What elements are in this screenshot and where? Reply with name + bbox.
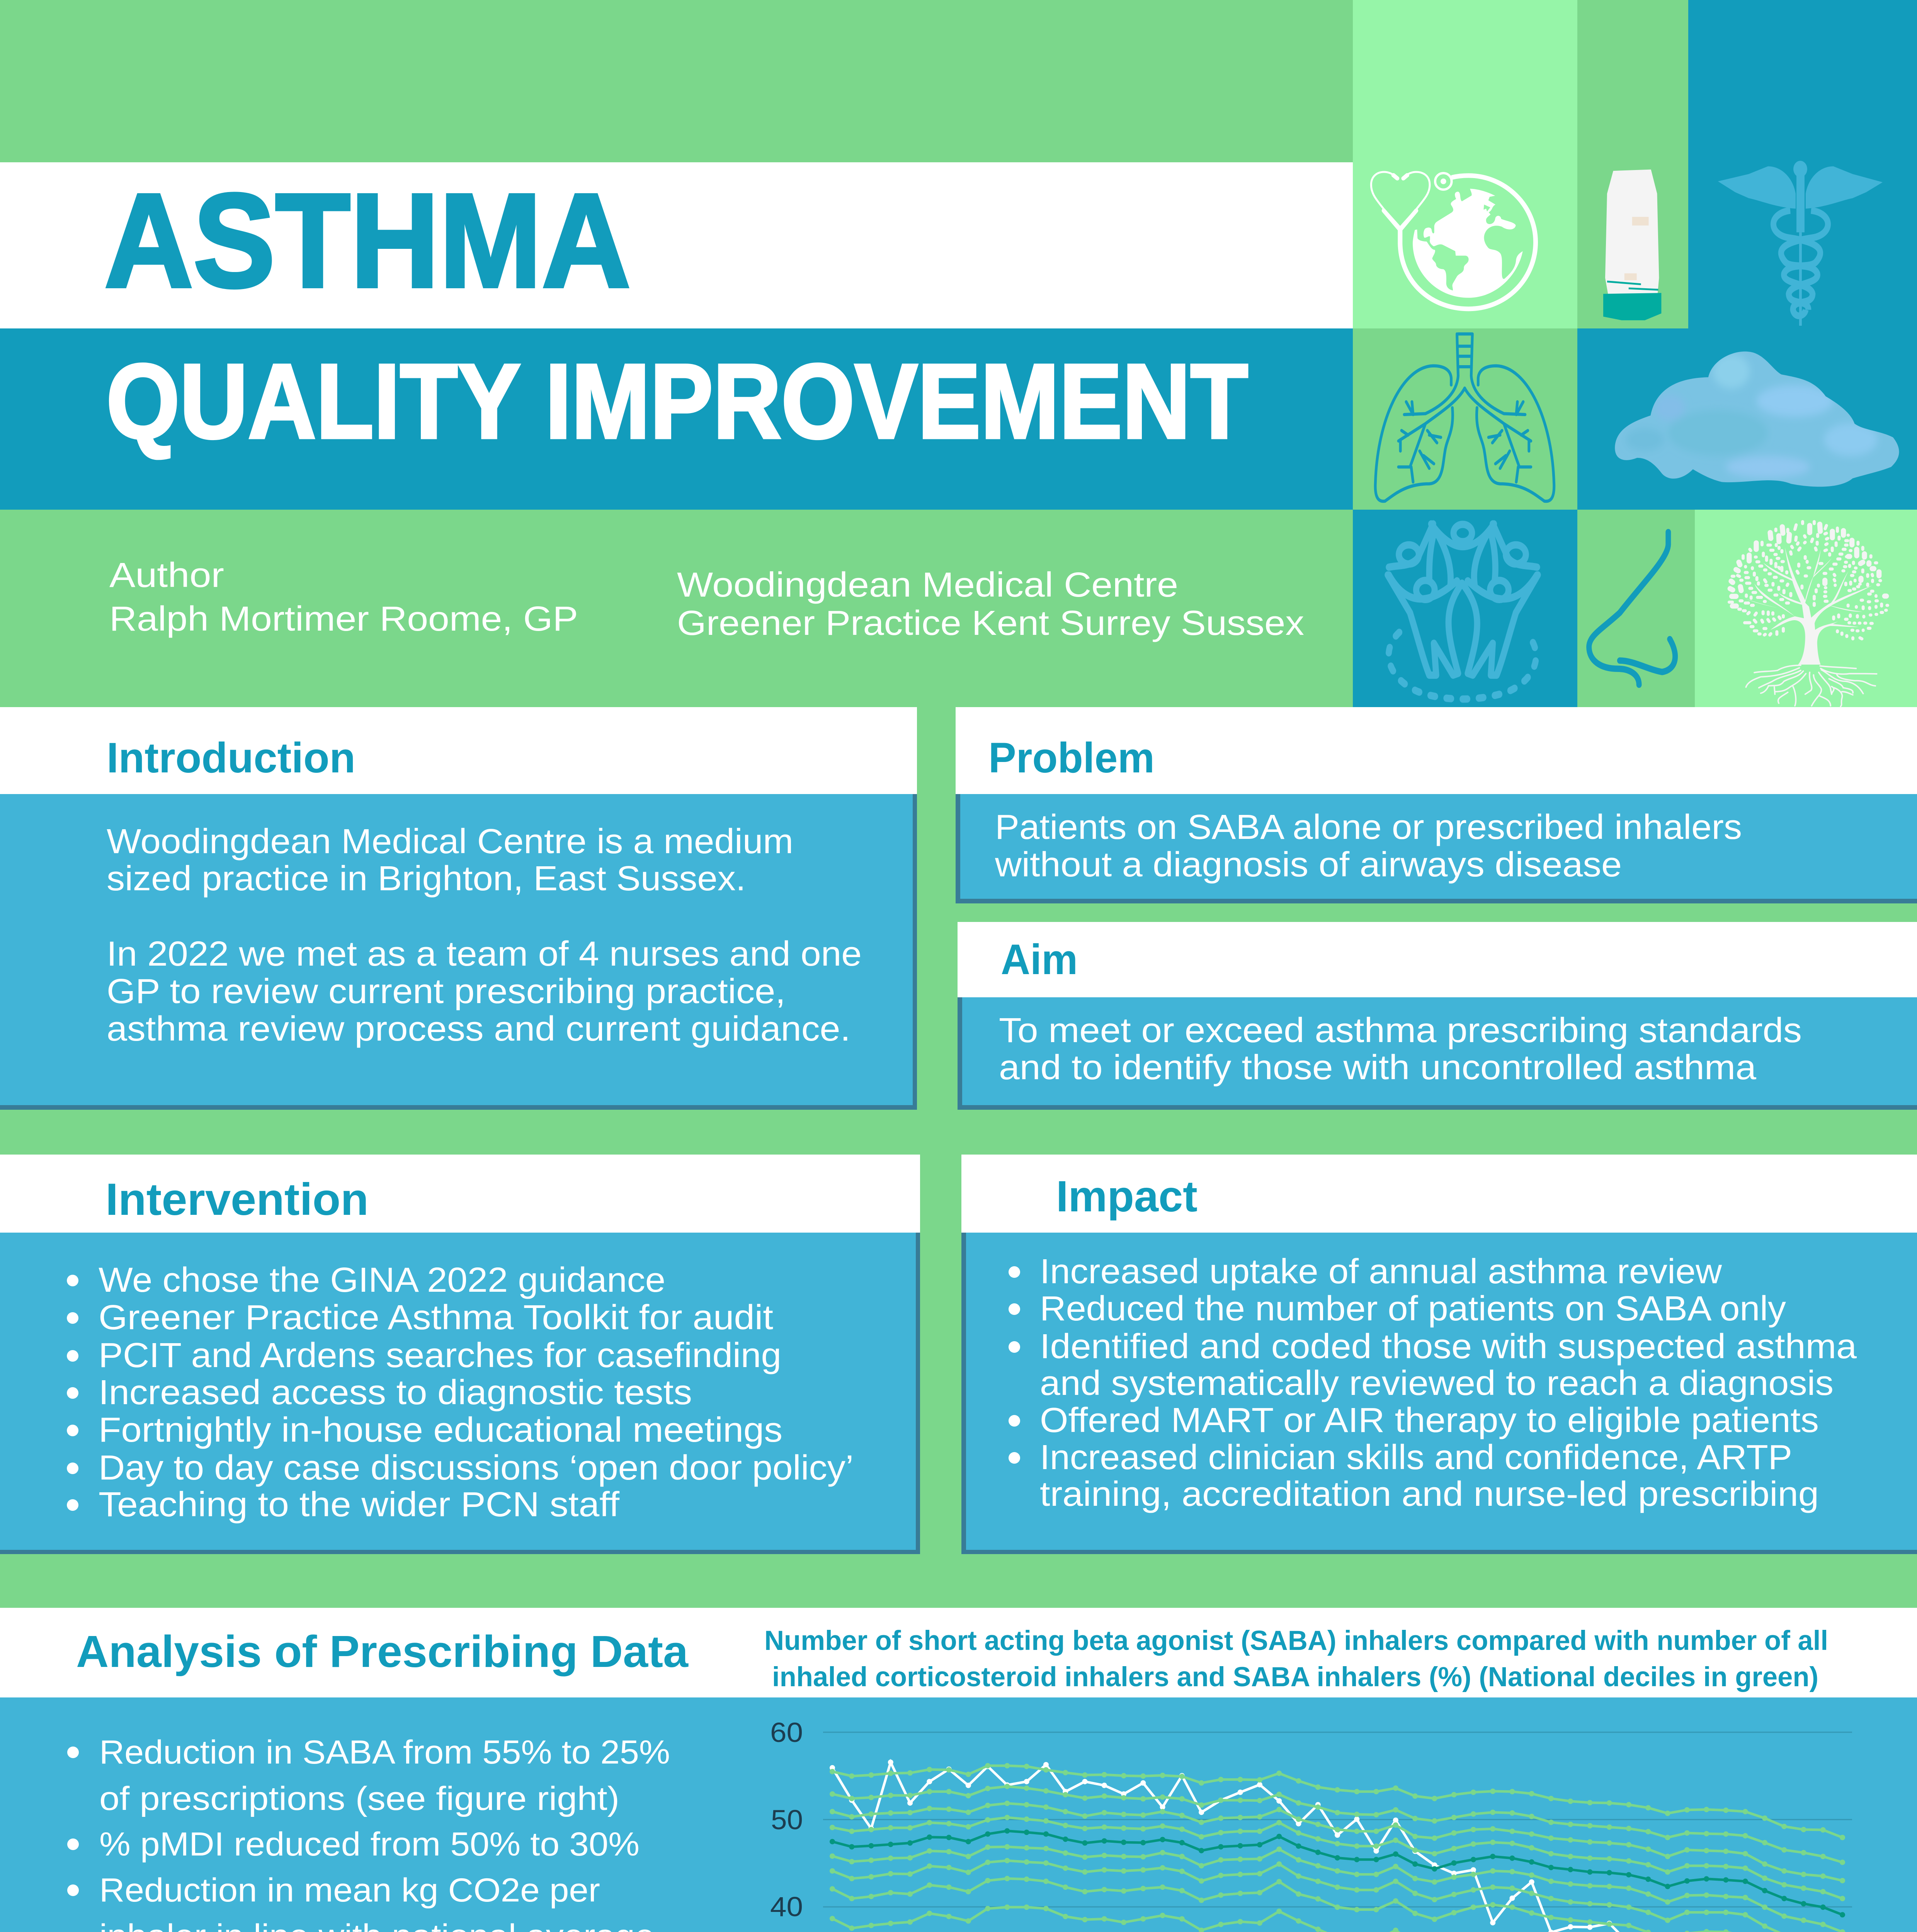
icon: lungs (1375, 334, 1554, 501)
text: problem body: Patients on SABA alone or prescribed inhalers (995, 808, 1742, 847)
list: intervention bullets: Greener Practice Asthma Toolkit for audit (99, 1298, 773, 1337)
text: aim body (999, 1011, 1802, 1087)
y axis labels (770, 1718, 803, 1932)
icon grid (1353, 0, 1917, 707)
list: analysis bullets (67, 1734, 670, 1932)
list: intervention bullets: We chose the GINA 2022 guidance (99, 1261, 665, 1299)
list: impact bullets: Reduced the number of patients on SABA only (1040, 1289, 1786, 1328)
text: aim body: and to identify those with uncontrolled asthma (999, 1048, 1757, 1087)
list: impact bullets: and systematically reviewed to reach a diagnosis (1040, 1364, 1834, 1403)
header: title (0, 162, 1353, 510)
list: intervention bullets: Fortnightly in-house educational meetings (99, 1411, 782, 1449)
icons on grid (1375, 161, 1899, 699)
panel: introduction (0, 707, 917, 1110)
text: introduction body: GP to review current prescribing practice, (107, 972, 786, 1011)
list: impact bullets: Increased clinician skills and confidence, ARTP (1040, 1438, 1792, 1477)
heading: Asthma: ASTHMA (104, 166, 631, 315)
heading: introduction: Introduction (107, 734, 356, 782)
list: impact bullets: Increased uptake of annual asthma review (1040, 1252, 1722, 1291)
list: intervention bullets: PCIT and Ardens searches for casefinding (99, 1336, 781, 1375)
icon: stethoscope and globe (1371, 172, 1536, 309)
affiliation block: Woodingdean Medical Centre (677, 566, 1178, 604)
list: intervention bullets: Teaching to the wider PCN staff (99, 1485, 620, 1524)
heading: Quality Improvement: QUALITY IMPROVEMENT (106, 342, 1248, 461)
author block: Author (109, 556, 224, 595)
text: introduction body (107, 822, 862, 1048)
author block (109, 556, 578, 638)
icon: caduceus (1718, 161, 1883, 326)
panel: impact (961, 1155, 1917, 1554)
author block: Ralph Mortimer Roome, GP (109, 600, 578, 638)
list: intervention bullets: Day to day case discussions ‘open door policy’ (99, 1449, 854, 1487)
list: intervention bullets: Increased access to diagnostic tests (99, 1373, 692, 1412)
panel: analysis of prescribing data (0, 1608, 1917, 1932)
icon: nose (1589, 532, 1675, 685)
text: aim body: To meet or exceed asthma prescribing standards (999, 1011, 1802, 1050)
y axis labels: 50 (771, 1805, 803, 1835)
list: intervention bullets (67, 1261, 854, 1524)
text: introduction body: Woodingdean Medical Centre is a medium (107, 822, 793, 861)
list: impact bullets: Identified and coded those with suspected asthma (1040, 1327, 1857, 1366)
chart title: inhaled corticosteroid inhalers and SABA inhalers (%) (National deciles in green) (772, 1662, 1818, 1692)
list: impact bullets: training, accreditation and nurse-led prescribing (1040, 1475, 1819, 1514)
panel: intervention (0, 1155, 920, 1554)
affiliation block (677, 566, 1304, 643)
text: introduction body: sized practice in Brighton, East Sussex. (107, 859, 746, 898)
list: analysis bullets: Reduction in SABA from 55% to 25% (99, 1734, 670, 1771)
icon: tree (1729, 522, 1888, 706)
text: introduction body: asthma review process and current guidance. (107, 1010, 850, 1048)
heading: impact: Impact (1056, 1172, 1197, 1221)
list: analysis bullets: % pMDI reduced from 50% to 30% (99, 1826, 640, 1863)
affiliation block: Greener Practice Kent Surrey Sussex (677, 604, 1304, 643)
heading: analysis: Analysis of Prescribing Data (76, 1626, 689, 1677)
list: analysis bullets: Reduction in mean kg CO2e per (99, 1872, 600, 1909)
text: problem body: without a diagnosis of airways disease (995, 845, 1622, 884)
chart title (764, 1626, 1828, 1692)
heading: problem: Problem (988, 734, 1155, 782)
heading: aim: Aim (1001, 936, 1078, 983)
y axis labels: 40 (770, 1892, 803, 1922)
chart title: Number of short acting beta agonist (SABA) inhalers compared with number of all (764, 1626, 1828, 1656)
text: introduction body: In 2022 we met as a team of 4 nurses and one (107, 935, 862, 973)
text: problem body (995, 808, 1742, 884)
panel: problem (956, 707, 1917, 903)
data series: practice, national deciles and median (832, 1762, 1842, 1932)
line chart: SABA share 2021 to 2025 (770, 1718, 1852, 1932)
list: impact bullets: Offered MART or AIR therapy to eligible patients (1040, 1401, 1819, 1440)
list: analysis bullets: of prescriptions (see figure right) (99, 1780, 619, 1817)
list: impact bullets (1009, 1252, 1857, 1514)
y axis labels: 60 (770, 1718, 803, 1748)
icon: inhaler (1603, 170, 1661, 320)
icon: community figures (1388, 524, 1538, 699)
icon: cloud (1615, 352, 1899, 487)
heading: intervention: Intervention (105, 1174, 369, 1225)
panel: aim (958, 922, 1917, 1110)
